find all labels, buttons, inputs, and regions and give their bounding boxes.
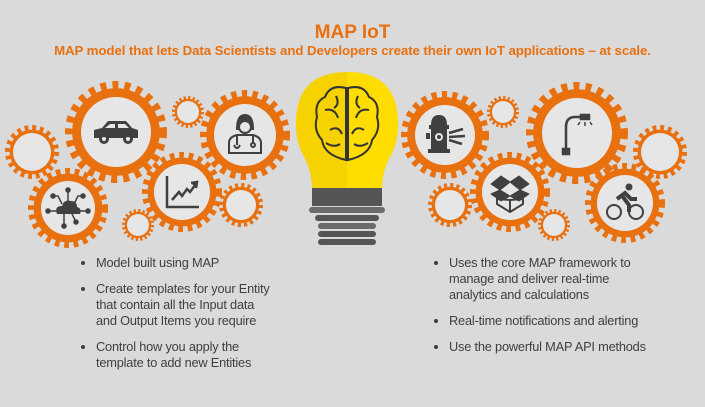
text: left bullets: template to add new Entities <box>96 355 251 370</box>
text: left bullets: Create templates for your Entity <box>96 281 270 296</box>
gear: cloud <box>31 171 105 245</box>
icon: street lamp <box>563 115 592 154</box>
gear: bike <box>588 166 662 240</box>
gear: lamp <box>530 86 624 180</box>
gear: chart <box>145 155 219 229</box>
icon: cloud network <box>46 188 90 228</box>
gear: right ring <box>636 128 684 176</box>
text: left bullets: Model built using MAP <box>96 255 219 270</box>
gear: small top ring <box>174 98 202 126</box>
text: right bullets: Uses the core MAP framework to <box>449 255 631 270</box>
text: left bullets: Control how you apply the <box>96 339 239 354</box>
text: left bullets: and Output Items you require <box>96 313 256 328</box>
gear: car <box>69 85 163 179</box>
gear: small bottom ring <box>124 211 152 239</box>
icon: car <box>94 121 138 144</box>
text: right bullets: Real-time notifications and alerting <box>449 313 638 328</box>
lightbulb <box>296 72 398 245</box>
icon: hydrant <box>426 115 465 153</box>
gear: left ring <box>8 128 56 176</box>
icon: box <box>491 176 529 212</box>
text: right bullets: manage and deliver real-time <box>449 271 609 286</box>
gear: box <box>473 155 547 229</box>
gear: small top ring right <box>489 98 517 126</box>
gear: small right ring <box>221 185 261 225</box>
text: left bullets: that contain all the Input data <box>96 297 254 312</box>
icon: chart <box>167 176 199 207</box>
text: left bullets <box>81 255 270 370</box>
title: MAP IoT <box>315 22 390 43</box>
text: right bullets: analytics and calculations <box>449 287 589 302</box>
text: right bullets: Use the powerful MAP API methods <box>449 339 646 354</box>
icon: cyclist <box>607 184 643 219</box>
gear: small left bottom ring <box>430 185 470 225</box>
icon: doctor <box>229 115 261 153</box>
text: right bullets <box>434 255 646 354</box>
subtitle: MAP model that lets Data Scientists and Developers create their own IoT applications – at scale. <box>54 43 651 58</box>
icon: brain <box>316 87 378 160</box>
gear: small bottom ring right <box>540 211 568 239</box>
gear: hydrant <box>405 95 485 175</box>
gear: doctor <box>204 94 286 176</box>
